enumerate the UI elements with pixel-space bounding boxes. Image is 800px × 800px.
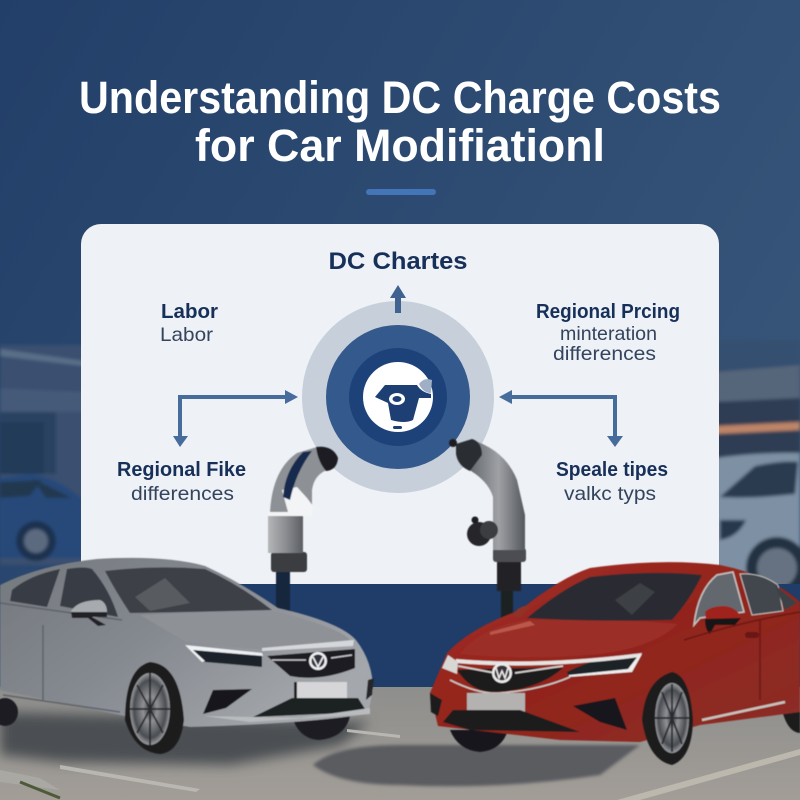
front wheel xyxy=(642,672,693,765)
far side wheels xyxy=(450,730,508,752)
door lines and sill xyxy=(684,612,800,700)
text block: Regional Fike: differences xyxy=(131,483,234,505)
far front wheel xyxy=(292,716,350,740)
arrow: hub to right branch xyxy=(499,390,623,447)
text block: Regional Prcing: Regional Prcing xyxy=(536,301,680,323)
lower grille and fog lamp xyxy=(443,710,580,732)
text block: Regional Fike xyxy=(117,459,246,505)
body xyxy=(0,558,373,727)
hood highlight xyxy=(140,611,350,650)
body xyxy=(430,562,800,742)
text block: Regional Prcing xyxy=(536,301,680,365)
arrow: hub to left branch xyxy=(173,390,298,447)
title: for Car Modifiationl xyxy=(195,120,605,171)
door and sill lines xyxy=(0,603,122,712)
text block: Labor: Labor xyxy=(161,301,218,323)
title xyxy=(79,72,721,171)
grille xyxy=(267,649,355,678)
headlight xyxy=(567,654,642,677)
background scene: right building and silver car xyxy=(716,340,800,599)
text block: Regional Prcing: minteration xyxy=(560,323,657,345)
text block: Labor xyxy=(160,301,218,346)
red car xyxy=(430,562,800,765)
navy band behind cars xyxy=(0,584,800,688)
mirror xyxy=(705,606,741,620)
side windows xyxy=(10,569,60,607)
text block: Regional Prcing: differences xyxy=(553,343,656,365)
title: Understanding DC Charge Costs xyxy=(79,72,721,123)
icon: seat-like symbol xyxy=(375,379,432,429)
headlight xyxy=(185,645,262,667)
left charger plug xyxy=(268,447,338,612)
right charger plug xyxy=(449,439,526,624)
text block: Speale tipes: valkc typs xyxy=(564,483,656,505)
ground xyxy=(0,687,800,800)
text block: Speale tipes: Speale tipes xyxy=(556,459,668,481)
title accent bar xyxy=(366,189,436,195)
side windows xyxy=(694,572,744,625)
plate xyxy=(294,682,297,700)
arrow: up to DC Chartes xyxy=(390,285,406,313)
front wheel xyxy=(125,662,184,754)
text block: Regional Fike: Regional Fike xyxy=(117,459,246,481)
windshield xyxy=(105,567,272,613)
background scene: left building and blue car xyxy=(0,345,84,565)
hub: concentric circles with icon xyxy=(302,301,494,493)
lower grille and fog lamp xyxy=(253,698,367,717)
mirror xyxy=(71,600,107,618)
hood highlight xyxy=(460,620,678,657)
grille xyxy=(457,668,563,692)
heading: DC Chartes: DC Chartes xyxy=(328,248,468,275)
far side wheel xyxy=(0,698,18,726)
plate xyxy=(467,693,525,713)
windshield xyxy=(527,573,702,621)
panel: main card xyxy=(81,224,719,584)
silver car xyxy=(0,558,374,754)
text block: Labor: Labor xyxy=(160,324,214,346)
text block: Speale tipes xyxy=(556,459,668,505)
